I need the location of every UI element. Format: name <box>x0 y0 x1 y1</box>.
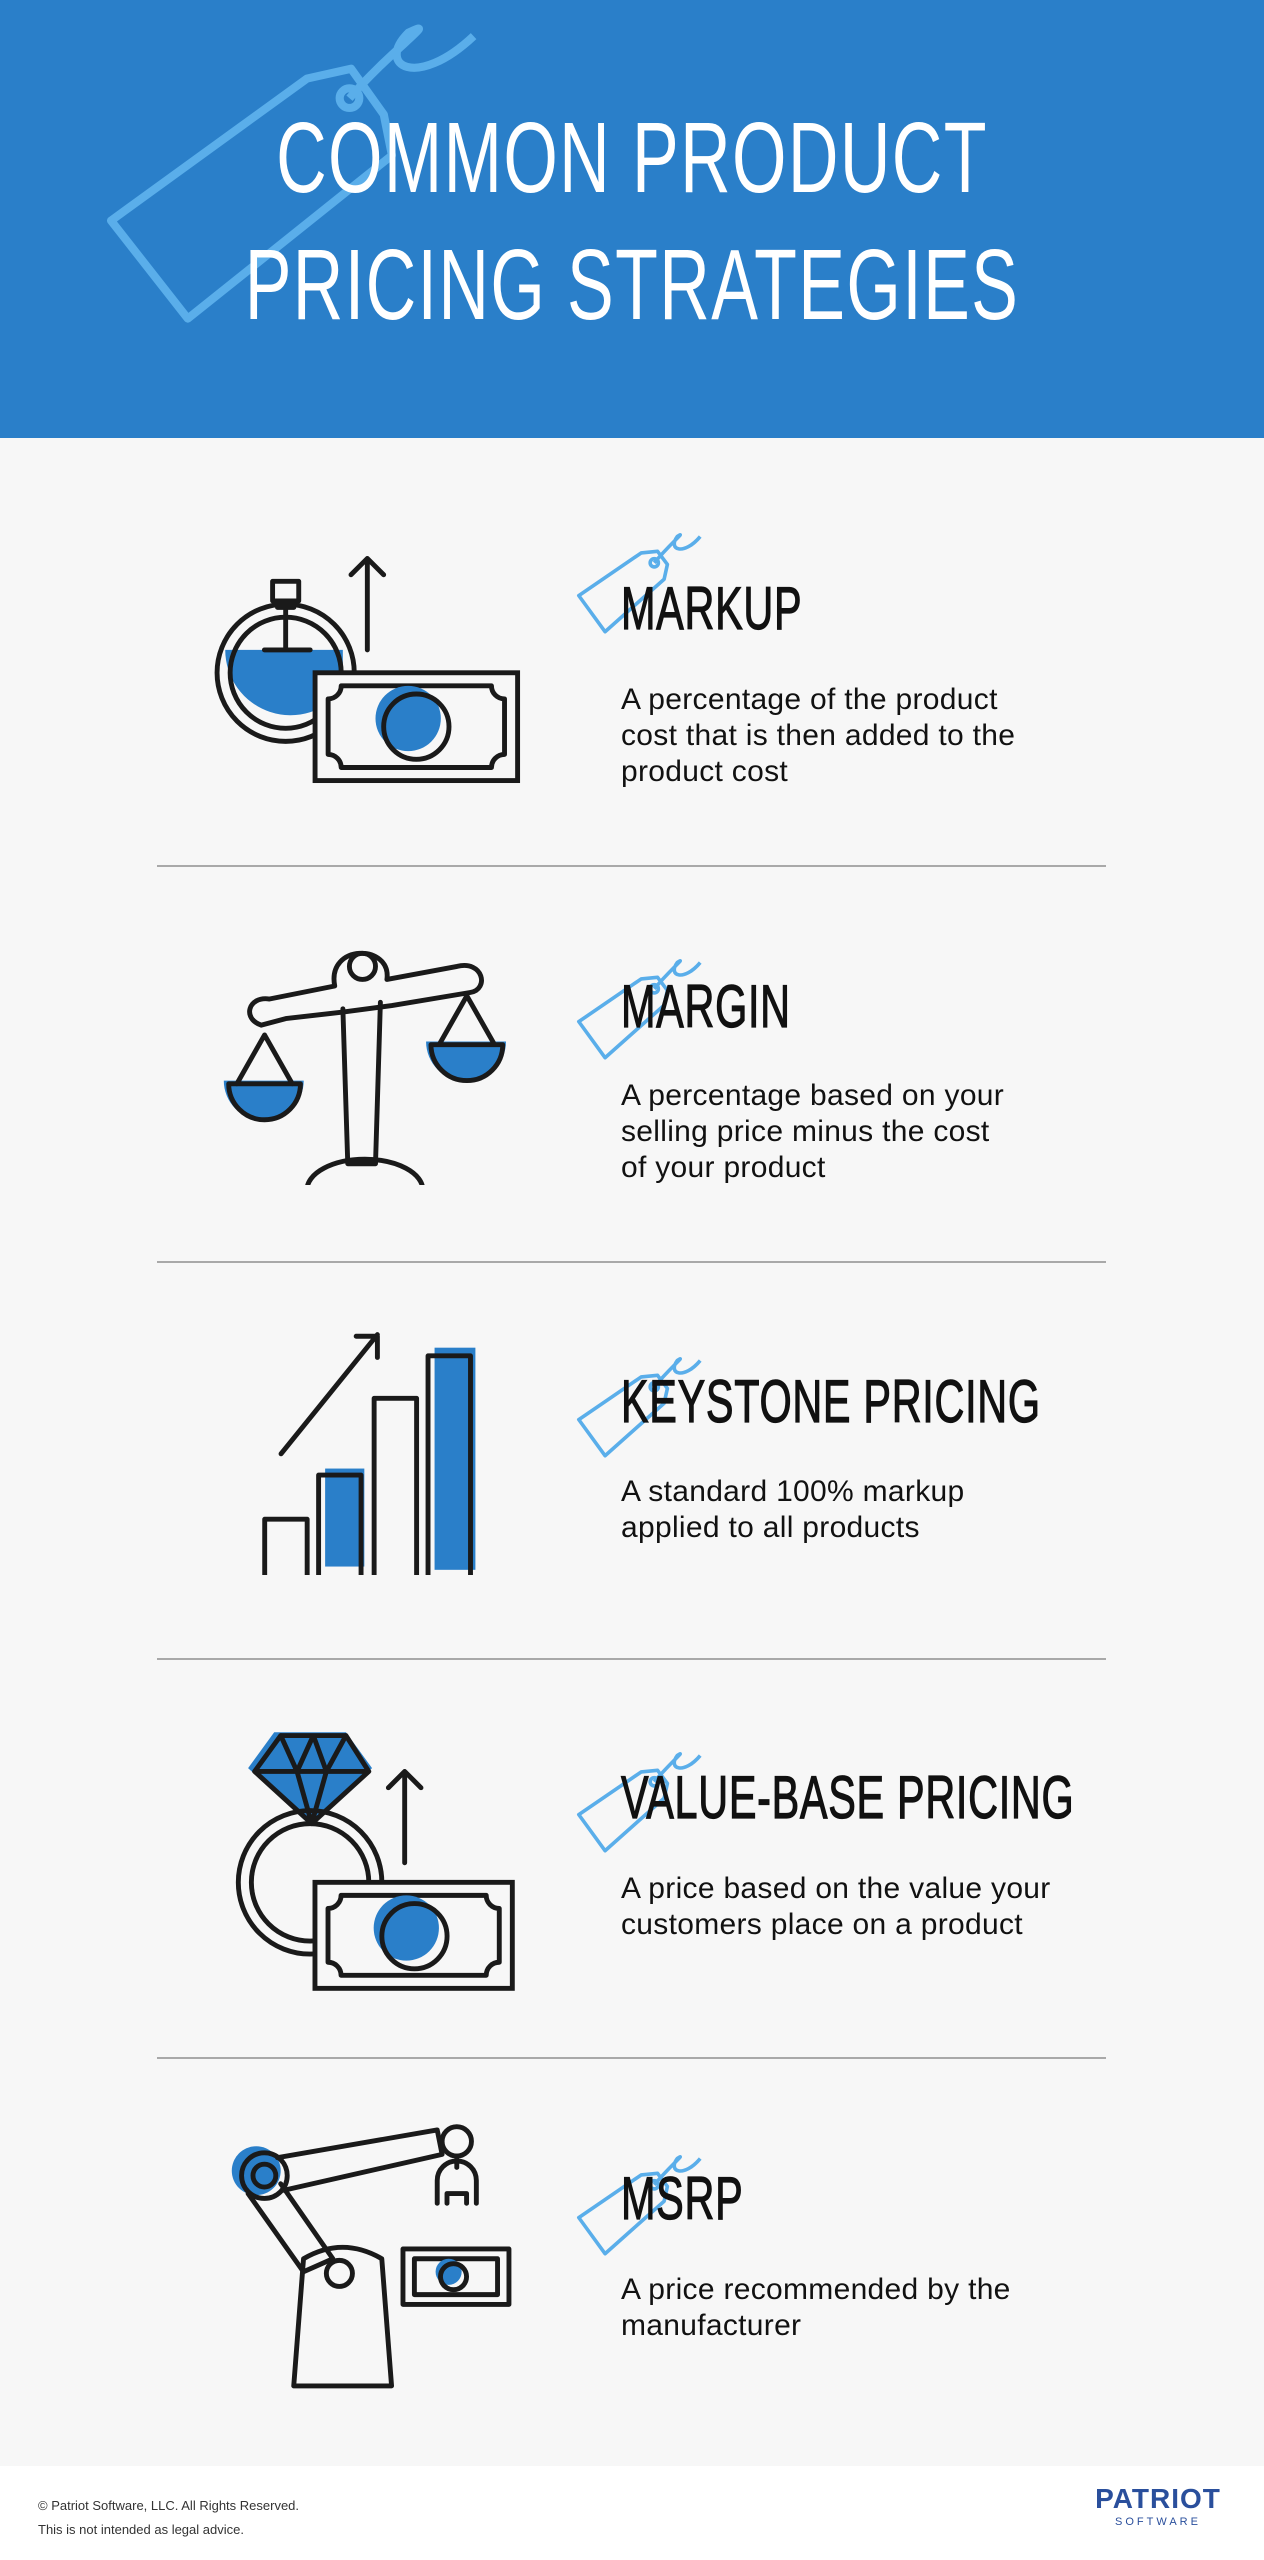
description: product cost <box>621 755 788 788</box>
description: applied to all products <box>621 1511 920 1544</box>
description <box>621 1475 964 1544</box>
logo: PATRIOT <box>1095 2483 1221 2514</box>
tag icon <box>576 1357 702 1458</box>
heading: KEYSTONE PRICING <box>621 1368 1041 1435</box>
section: markup <box>214 533 1015 788</box>
section: margin <box>224 950 1004 1185</box>
description: selling price minus the cost <box>621 1115 990 1148</box>
header <box>0 0 1264 438</box>
header: PRICING STRATEGIES <box>245 229 1019 341</box>
footer <box>0 2466 1264 2560</box>
header tag icon <box>107 24 476 323</box>
icon: bar chart <box>262 1332 476 1575</box>
description <box>621 683 1015 788</box>
description: cost that is then added to the <box>621 719 1015 752</box>
icon: robot arm <box>232 2124 512 2388</box>
heading: VALUE-BASE PRICING <box>621 1764 1074 1831</box>
icon: scale <box>224 950 506 1185</box>
description <box>621 2273 1011 2342</box>
tag icon <box>576 533 702 634</box>
description <box>621 1079 1004 1184</box>
description: customers place on a product <box>621 1908 1023 1941</box>
description <box>621 1872 1051 1941</box>
heading: MSRP <box>621 2165 743 2232</box>
description: A percentage of the product <box>621 683 998 716</box>
icon: ring and money <box>236 1732 515 1991</box>
heading: MARKUP <box>621 575 802 642</box>
tag icon <box>576 1752 702 1853</box>
title: COMMON PRODUCT <box>276 102 988 214</box>
section: value-based <box>236 1732 1074 1991</box>
logo <box>1095 2483 1221 2528</box>
description: manufacturer <box>621 2309 801 2342</box>
section: keystone <box>262 1332 1041 1575</box>
description: A price recommended by the <box>621 2273 1011 2306</box>
copyright text: This is not intended as legal advice. <box>38 2522 244 2537</box>
tag icon <box>576 959 702 1060</box>
copyright text <box>38 2498 299 2537</box>
section: msrp <box>232 2124 1011 2388</box>
copyright text: © Patriot Software, LLC. All Rights Reserved. <box>38 2498 299 2513</box>
heading: MARGIN <box>621 973 791 1040</box>
logo: SOFTWARE <box>1115 2516 1201 2528</box>
description: A standard 100% markup <box>621 1475 964 1508</box>
description: A percentage based on your <box>621 1079 1004 1112</box>
description: of your product <box>621 1151 826 1184</box>
icon: perfume and money <box>214 556 520 783</box>
description: A price based on the value your <box>621 1872 1051 1905</box>
tag icon <box>576 2155 702 2256</box>
